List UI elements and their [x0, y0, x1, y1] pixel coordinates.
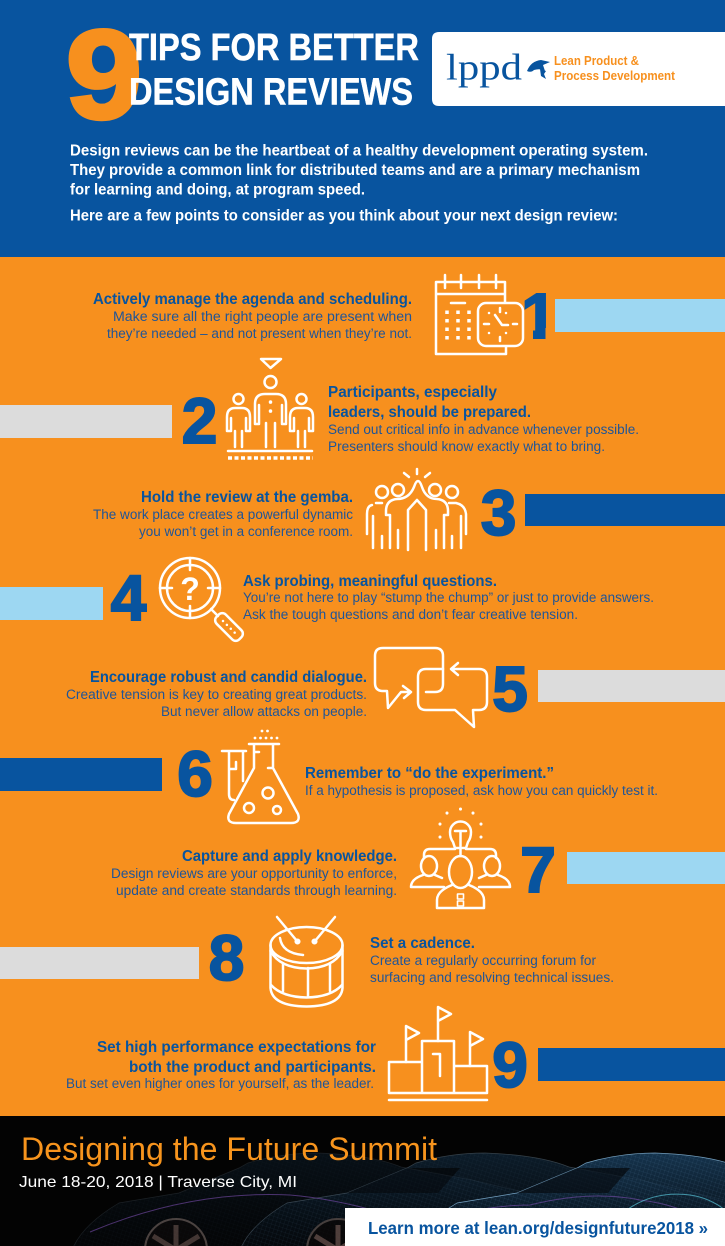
- body text: Send out critical info in advance whenever possible.: [328, 422, 639, 437]
- body text: [370, 953, 614, 985]
- body text: [111, 866, 397, 898]
- call to action: [345, 1208, 725, 1246]
- title: [129, 27, 419, 114]
- intro text: [70, 142, 648, 224]
- panel: tips: [0, 257, 725, 1116]
- icon: leader and team: [227, 359, 313, 458]
- heading: [97, 1039, 376, 1076]
- intro text: Here are a few points to consider as you think about your next design review:: [70, 208, 618, 224]
- body text: surfacing and resolving technical issues.: [370, 970, 614, 985]
- icon: magnifier with question mark: [160, 558, 245, 643]
- bar: [538, 670, 725, 702]
- body text: Make sure all the right people are present when: [113, 309, 412, 324]
- heading: [328, 384, 531, 421]
- icon: calendar and clock: [436, 275, 523, 354]
- body text: Create a regularly occurring forum for: [370, 953, 597, 968]
- tip 3: [93, 469, 725, 550]
- logo panel: [432, 32, 725, 106]
- heading: Hold the review at the gemba.: [141, 489, 353, 506]
- body text: If a hypothesis is proposed, ask how you can quickly test it.: [305, 783, 658, 798]
- logo text: [554, 53, 676, 83]
- question mark: ?: [180, 571, 200, 607]
- panel: footer banner: [0, 1116, 725, 1246]
- tip 7: [111, 809, 725, 908]
- body text: Ask the tough questions and don’t fear creative tension.: [243, 607, 578, 622]
- icon: drum: [270, 917, 342, 1006]
- heading: Encourage robust and candid dialogue.: [90, 669, 367, 686]
- body text: [243, 590, 654, 622]
- intro text: Design reviews can be the heartbeat of a healthy development operating system.: [70, 142, 648, 160]
- bar: [555, 299, 725, 332]
- heading: Set high performance expectations for: [97, 1039, 376, 1056]
- body text: But set even higher ones for yourself, as the leader.: [66, 1076, 374, 1091]
- bar: [538, 1048, 725, 1081]
- body text: [328, 422, 639, 454]
- body text: You’re not here to play “stump the chump” or just to provide answers.: [243, 590, 654, 605]
- body text: Presenters should know exactly what to bring.: [328, 439, 605, 454]
- tip 8: [0, 917, 614, 1006]
- icon: podium with flags: [389, 1007, 487, 1100]
- title: DESIGN REVIEWS: [129, 72, 413, 114]
- bar: [0, 758, 162, 791]
- tip 9: [66, 1007, 725, 1101]
- bar: [567, 852, 725, 884]
- logo text: Lean Product &: [554, 53, 639, 68]
- number: 6: [177, 738, 213, 810]
- heading: Actively manage the agenda and scheduling.: [93, 291, 412, 308]
- number: 7: [520, 834, 556, 906]
- heading: Participants, especially: [328, 384, 497, 401]
- number: 9: [492, 1029, 528, 1101]
- tip 4: [0, 558, 654, 643]
- bar: [0, 947, 199, 979]
- heading: both the product and participants.: [129, 1059, 376, 1076]
- icon: speech bubbles: [375, 648, 487, 727]
- number: 4: [111, 562, 147, 634]
- heading: Set a cadence.: [370, 935, 475, 952]
- body text: Design reviews are your opportunity to enforce,: [111, 866, 397, 881]
- heading: Remember to “do the experiment.”: [305, 765, 554, 782]
- intro text: for learning and doing, at program speed.: [70, 182, 365, 198]
- body text: they’re needed – and not present when they’re not.: [107, 326, 412, 341]
- body text: update and create standards through learning.: [116, 883, 397, 898]
- heading: leaders, should be prepared.: [328, 404, 531, 421]
- tip 1: [93, 275, 725, 354]
- tip 6: [0, 731, 658, 823]
- heading: Capture and apply knowledge.: [182, 848, 397, 865]
- wireframe cars image: [72, 1153, 725, 1246]
- call to action: Learn more at lean.org/designfuture2018 »: [368, 1218, 708, 1238]
- number: 8: [209, 922, 244, 994]
- body text: The work place creates a powerful dynamic: [93, 507, 353, 522]
- bar: [0, 587, 103, 620]
- title: TIPS FOR BETTER: [129, 27, 419, 69]
- icon: flask and test tube: [222, 731, 299, 823]
- number: 5: [492, 653, 528, 725]
- body text: Creative tension is key to creating great products.: [66, 687, 367, 702]
- bar: [525, 494, 725, 526]
- number: 2: [182, 385, 217, 457]
- tip 5: [66, 648, 725, 727]
- tip 2: [0, 359, 639, 458]
- summit date and place: June 18-20, 2018 | Traverse City, MI: [19, 1174, 297, 1191]
- icon: team high five: [367, 469, 466, 550]
- number: 3: [481, 477, 516, 549]
- number: 1: [521, 280, 557, 352]
- intro text: They provide a common link for distributed teams and are a primary mechanism: [70, 162, 640, 179]
- bar: [0, 405, 172, 438]
- logo panel: lppd: [446, 48, 523, 88]
- big number 9: 9: [66, 4, 142, 145]
- body text: you won’t get in a conference room.: [139, 524, 353, 539]
- heading: Ask probing, meaningful questions.: [243, 573, 497, 590]
- logo text: Process Development: [554, 68, 676, 83]
- summit title: Designing the Future Summit: [21, 1131, 437, 1167]
- icon: lightbulb over team: [411, 809, 510, 908]
- panel: header: [0, 0, 725, 257]
- body text: [107, 309, 412, 341]
- body text: [66, 687, 367, 719]
- icon: bird: [527, 60, 550, 79]
- body text: [93, 507, 353, 539]
- body text: But never allow attacks on people.: [161, 704, 367, 719]
